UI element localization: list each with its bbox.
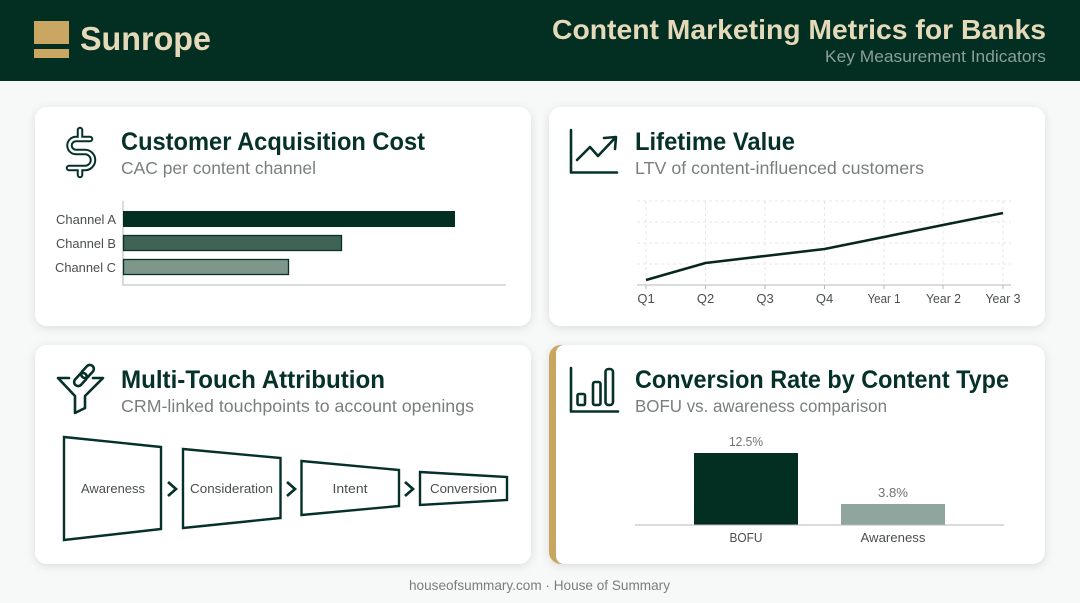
panel: conversion rate by content type — [549, 345, 1045, 564]
stage: conversion: Conversion — [430, 481, 497, 496]
description: LTV of content-influenced customers — [635, 158, 924, 178]
stage: consideration — [183, 449, 280, 528]
stage: awareness — [64, 437, 161, 540]
line chart: LTV over time: Year 1 — [868, 291, 900, 306]
line chart: LTV over time — [637, 201, 1020, 306]
brand name: Sunrope — [80, 20, 211, 57]
heading: Lifetime Value — [635, 128, 795, 156]
bar chart: conversion rates: 12.5% — [729, 434, 763, 449]
arrow — [287, 482, 295, 496]
heading: Customer Acquisition Cost — [121, 128, 426, 156]
heading: Multi-Touch Attribution — [121, 366, 385, 394]
main title: Content Marketing Metrics for Banks — [552, 14, 1046, 45]
description: BOFU vs. awareness comparison — [635, 396, 887, 416]
arrow — [168, 482, 176, 496]
panel: multi-touch attribution — [35, 345, 531, 564]
line chart: LTV over time: Q2 — [697, 291, 714, 306]
panel: lifetime value — [549, 107, 1045, 326]
footer: houseofsummary.com · House of Summary — [409, 577, 670, 593]
icon: rising trend chart — [571, 130, 617, 172]
bar chart: conversion rates — [635, 434, 1004, 545]
bar chart: CAC by channel: Channel C — [55, 260, 116, 275]
stage: conversion — [420, 472, 507, 505]
bar chart: conversion rates: Awareness — [860, 530, 926, 545]
bar chart: CAC by channel: Channel A — [56, 212, 116, 227]
heading: Conversion Rate by Content Type — [635, 366, 1009, 394]
description: CRM-linked touchpoints to account openings — [121, 396, 474, 416]
bar chart: CAC by channel: Channel B — [56, 236, 116, 251]
line chart: LTV over time: Q4 — [816, 291, 833, 306]
arrow — [405, 482, 413, 496]
bar chart: conversion rates: BOFU — [730, 530, 762, 545]
stage: awareness: Awareness — [81, 481, 145, 496]
icon: bar chart — [571, 368, 618, 412]
header band — [0, 0, 1080, 81]
stage: intent — [302, 461, 399, 515]
icon: funnel with chain link — [58, 363, 103, 413]
line chart: LTV over time: Year 3 — [986, 291, 1020, 306]
logo mark — [34, 21, 69, 58]
panel: customer acquisition cost — [35, 107, 531, 326]
bar chart: CAC by channel — [55, 201, 506, 285]
description: CAC per content channel — [121, 158, 316, 178]
line chart: LTV over time: Year 2 — [926, 291, 961, 306]
line chart: LTV over time: Q1 — [637, 291, 655, 306]
bar chart: conversion rates: 3.8% — [878, 485, 908, 500]
stage: intent: Intent — [332, 481, 368, 496]
subtitle: Key Measurement Indicators — [825, 47, 1046, 66]
stage: consideration: Consideration — [190, 481, 273, 496]
icon: dollar sign — [69, 130, 93, 175]
funnel diagram — [64, 437, 507, 540]
line chart: LTV over time: Q3 — [756, 291, 774, 306]
